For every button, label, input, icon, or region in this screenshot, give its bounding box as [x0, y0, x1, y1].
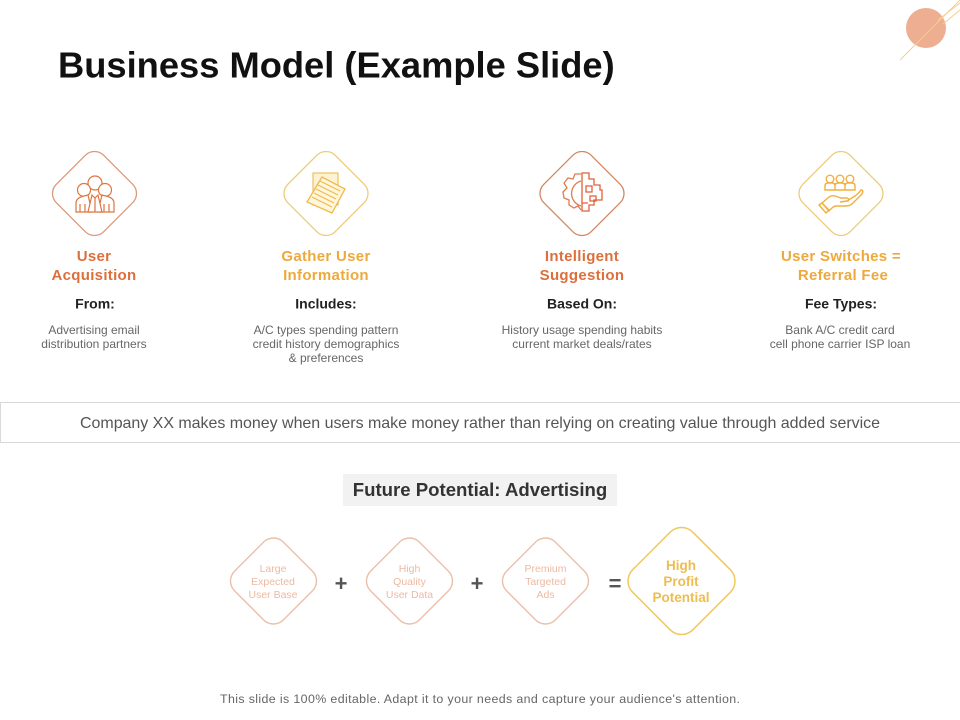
diamond: premium targeted ads: Ads [536, 589, 555, 601]
description: History usage spending habits [502, 323, 662, 337]
plus sign: + [335, 571, 347, 596]
column: intelligent suggestion [502, 146, 662, 351]
corner decoration: circle and lines [900, 0, 960, 60]
heading: future potential [343, 474, 617, 506]
equation diagram [225, 521, 742, 641]
diamond: premium targeted ads: Premium [524, 563, 567, 575]
heading: Acquisition [52, 267, 136, 284]
diamond: premium targeted ads: Targeted [525, 576, 566, 588]
equals sign: = [609, 571, 621, 596]
heading: future potential: Future Potential: Advertising [353, 479, 607, 500]
column: gather user information [253, 146, 399, 365]
diamond: large expected user base [225, 532, 322, 630]
subheading: Fee Types: [805, 296, 877, 312]
description: Advertising email [48, 323, 140, 337]
description: & preferences [289, 351, 363, 365]
icon: people group in diamond [47, 146, 142, 241]
subheading: Includes: [295, 296, 357, 312]
plus sign: + [471, 571, 483, 596]
description: A/C types spending pattern [254, 323, 398, 337]
diamond: high quality user data: High [399, 563, 420, 575]
heading: Suggestion [540, 267, 624, 284]
diamond: high profit potential [621, 521, 742, 641]
description: credit history demographics [253, 337, 399, 351]
footer note: This slide is 100% editable. Adapt it to your needs and capture your audience's attention. [220, 692, 740, 706]
diamond: large expected user base: User Base [248, 589, 298, 601]
icon: documents in diamond [279, 146, 373, 241]
diamond: high quality user data: Quality [393, 576, 427, 588]
description: Bank A/C credit card [785, 323, 895, 337]
heading: User [77, 248, 111, 265]
subheading: Based On: [547, 296, 617, 312]
heading: User Switches = [781, 248, 901, 265]
heading: Gather User [281, 248, 371, 265]
diamond: large expected user base: Large [260, 563, 287, 575]
description: distribution partners [41, 337, 147, 351]
heading: Referral Fee [798, 267, 888, 284]
diamond: large expected user base: Expected [251, 576, 295, 588]
description: current market deals/rates [512, 337, 652, 351]
diamond: high profit potential: High [666, 558, 696, 573]
title: Business Model (Example Slide) [58, 44, 615, 86]
icon: people on open hand in diamond [794, 146, 888, 241]
column: user acquisition [41, 146, 147, 351]
diamond: high profit potential: Potential [652, 590, 710, 605]
subheading: From: [75, 296, 115, 312]
banner: summary statement: Company XX makes money when users make money rather than relying on creating value through added service [80, 415, 880, 432]
icon: gear and circuit in diamond [535, 146, 629, 241]
column: user switches [770, 146, 910, 351]
diamond: high profit potential: Profit [663, 574, 699, 589]
heading: Intelligent [545, 248, 619, 265]
banner: summary statement [0, 402, 960, 442]
description: cell phone carrier ISP loan [770, 337, 910, 351]
diamond: premium targeted ads [497, 532, 594, 630]
diamond: high quality user data [361, 532, 458, 630]
heading: Information [283, 267, 369, 284]
diamond: high quality user data: User Data [386, 589, 433, 601]
